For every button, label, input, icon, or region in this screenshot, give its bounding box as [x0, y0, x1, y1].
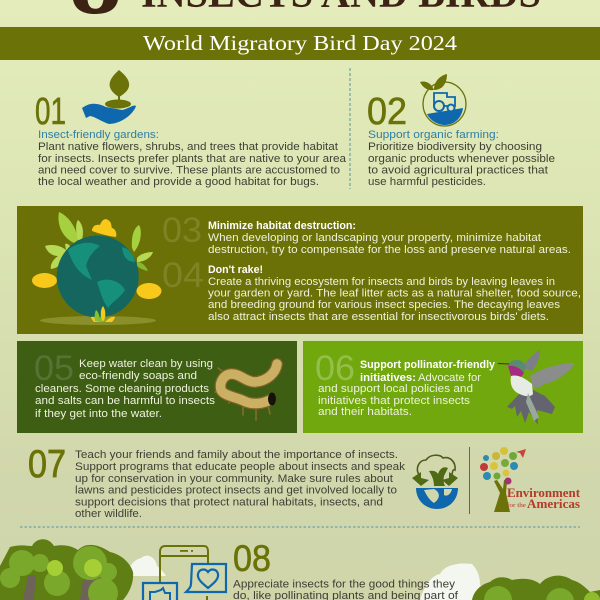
panel: tips 03 and 04: your garden or yard. The leaf litter acts as a natural shelter, food source, — [208, 288, 581, 300]
panel: tip 05: eco-friendly soaps and — [79, 370, 197, 382]
tip 08: Appreciate insects for the good things they — [233, 578, 456, 590]
tip 02: organic farming: Prioritize biodiversity by choosing — [368, 141, 542, 153]
illustration: right trees — [472, 576, 600, 600]
panel: tips 03 and 04: 04 — [162, 256, 204, 295]
icon: phone with social reactions — [143, 546, 226, 600]
illustration: hummingbird — [498, 350, 575, 425]
panel: tips 03 and 04: Create a thriving ecosystem for insects and birds by leaving leaves in — [208, 276, 555, 288]
tip 07 — [28, 443, 406, 520]
logo: plant and globe bowl — [412, 455, 458, 509]
panel: tip 06: initiatives: — [360, 372, 416, 384]
panel: tip 05: cleaners. Some cleaning products — [35, 383, 210, 395]
panel: tips 03 and 04 — [17, 206, 583, 334]
tip 01: insect-friendly gardens: the local weather and provide a good habitat for bugs. — [38, 176, 319, 188]
tip 07: lawns and pesticides protect insects and get involved locally to — [75, 484, 397, 496]
tip 08: 08 — [233, 538, 271, 579]
tip 07: Teach your friends and family about the importance of insects. — [75, 449, 398, 461]
tip 02: organic farming: use harmful pesticides. — [368, 176, 486, 188]
panel: tip 06: Advocate for — [418, 372, 481, 384]
panel: tip 05: 05 — [34, 349, 74, 388]
panel: tip 06: Support pollinator-friendly — [360, 359, 496, 371]
panel: tip 06: initiatives that protect insects — [318, 395, 471, 407]
panel: tip 05: and salts can be harmful to insects — [35, 395, 216, 407]
panel: tip 06: and support local policies and — [318, 383, 473, 395]
panel: tips 03 and 04: Don't rake! — [208, 264, 263, 276]
logo: Environment for the Americas: Americas — [527, 496, 580, 511]
tip 01: insect-friendly gardens: and need cover to survive. These plants are accustomed to — [38, 164, 340, 176]
tip 01: insect-friendly gardens: Plant native flowers, shrubs, and trees that provide habitat — [38, 141, 338, 153]
panel: tips 03 and 04: also attract insects that are essential for insectivorous birds' diets. — [208, 311, 549, 323]
panel: tips 03 and 04: 03 — [162, 211, 202, 250]
tip 02: organic farming — [367, 74, 555, 188]
tip 07: other wildlife. — [75, 508, 142, 520]
tip 08 — [143, 538, 459, 600]
tip 07: support decisions that protect natural habitats, insects, and — [75, 496, 383, 508]
tip 01: insect-friendly gardens: for insects. Insects prefer plants that are native to your area — [38, 153, 347, 165]
subtitle banner: World Migratory Bird Day 2024 — [143, 31, 458, 55]
tip 07: 07 — [28, 443, 66, 486]
tip 01: insect-friendly gardens — [35, 70, 347, 188]
title — [69, 0, 541, 36]
icon: hand holding plant — [82, 70, 136, 124]
panel: tip 05 — [17, 341, 297, 433]
tip 07: Support programs that educate people about insects and speak — [75, 461, 406, 473]
tip 02: organic farming: Support organic farming: — [368, 129, 499, 141]
tip 07: up for conservation in your community. Make sure rules about — [75, 473, 393, 485]
logo: Environment for the Americas: Environment — [507, 485, 581, 500]
panel: tips 03 and 04: and breeding ground for various insect species. The decaying leaves — [208, 299, 561, 311]
panel: tip 06: and their habitats. — [318, 406, 412, 418]
panel: tips 03 and 04: Minimize habitat destruction: — [208, 220, 356, 232]
subtitle banner — [0, 27, 600, 60]
tip 02: organic farming: to avoid agricultural practices that — [368, 164, 548, 176]
illustration: globe with leaves — [32, 212, 162, 325]
tip 02: organic farming: 02 — [367, 91, 407, 133]
panel: tips 03 and 04: destruction, try to compensate for the loss and preserve natural areas. — [208, 244, 571, 256]
tip 02: organic farming: organic products whenever possible — [368, 153, 555, 165]
logo: Environment for the Americas: for the — [507, 502, 526, 509]
icon: tractor in oval — [420, 74, 466, 126]
panel: tip 06: 06 — [315, 349, 355, 388]
panel: tips 03 and 04: When developing or landscaping your property, minimize habitat — [208, 232, 541, 244]
illustration: left trees — [0, 539, 133, 600]
illustration: clouds — [128, 556, 486, 600]
tip 01: insect-friendly gardens: 01 — [35, 91, 66, 133]
panel: tip 06 — [303, 341, 583, 433]
logo: Environment for the Americas — [480, 447, 581, 512]
panel: tip 05: Keep water clean by using — [79, 358, 213, 370]
tip 01: insect-friendly gardens: Insect-friendly gardens: — [38, 129, 159, 141]
panel: tip 05: if they get into the water. — [35, 408, 162, 420]
illustration: caterpillar — [215, 364, 277, 420]
